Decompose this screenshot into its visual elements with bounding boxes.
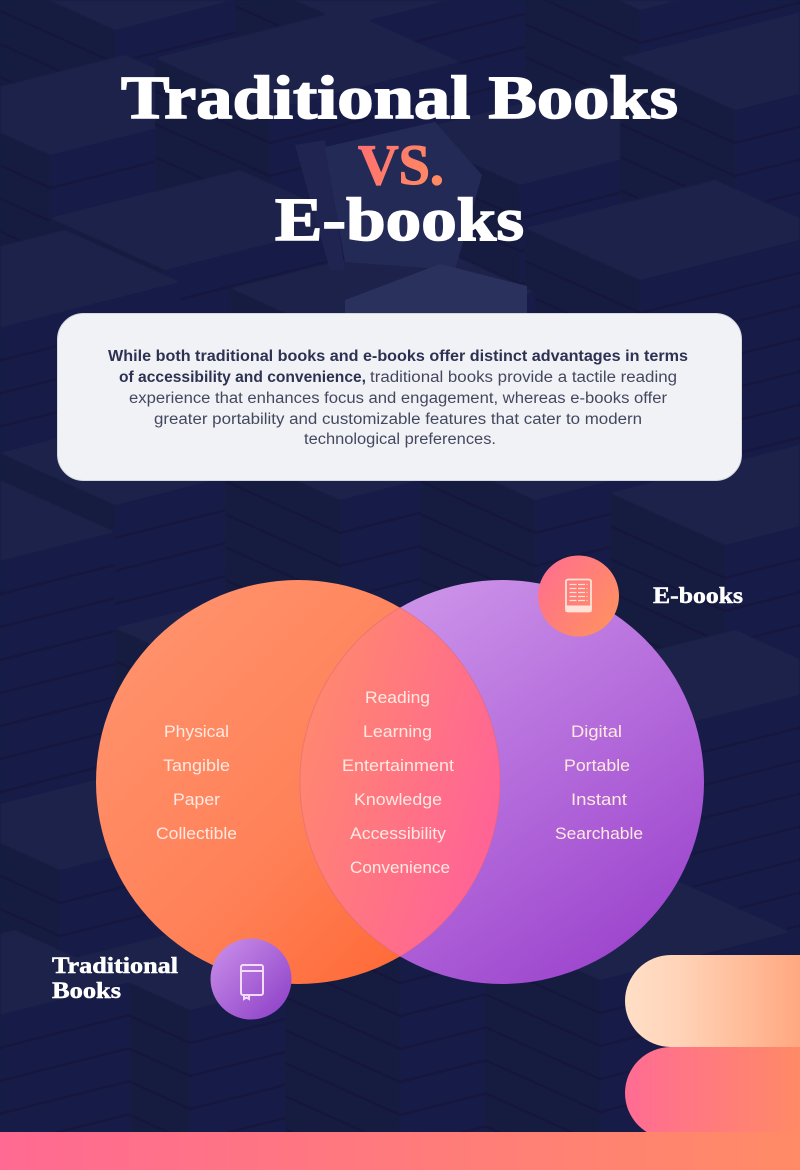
text: shared traits: Convenience	[350, 859, 450, 877]
label: traditional books: Traditional	[52, 953, 178, 978]
text: e-book traits: Instant	[571, 791, 627, 809]
decorative bottom bar	[0, 1132, 800, 1170]
circle: e-books	[300, 580, 704, 984]
text: traditional book traits	[156, 723, 237, 843]
text block: introduction paragraph: experience that enhances focus and engagement, whereas e-books offer	[129, 390, 667, 407]
text block: introduction paragraph: While both traditional books and e-books offer distinct advantages in terms	[108, 348, 688, 365]
icon: book badge	[210, 938, 292, 1020]
decorative book: pink pill	[625, 1047, 800, 1139]
text block: introduction paragraph: technological preferences.	[304, 431, 496, 448]
label: traditional books: Books	[52, 978, 121, 1003]
label: e-books: E-books	[653, 583, 743, 608]
title: E-books	[275, 187, 524, 254]
text: shared traits: Knowledge	[354, 791, 442, 809]
venn diagram	[96, 580, 704, 984]
text block: introduction paragraph: traditional books provide a tactile reading	[370, 369, 677, 386]
text: traditional book traits: Tangible	[163, 757, 230, 775]
text: e-book traits: Digital	[571, 723, 622, 741]
text: traditional book traits: Collectible	[156, 825, 237, 843]
text: shared traits: Accessibility	[350, 825, 447, 843]
title: Traditional Books	[121, 65, 678, 132]
decorative book: peach pill	[625, 955, 800, 1047]
text: traditional book traits: Paper	[173, 791, 221, 809]
label: traditional books	[52, 953, 178, 1003]
text: shared traits	[342, 689, 454, 877]
icon: e-reader badge	[538, 556, 619, 636]
text: shared traits: Entertainment	[342, 757, 454, 775]
panel: introduction	[58, 314, 742, 480]
text: e-book traits	[555, 723, 643, 843]
circle: traditional books	[96, 580, 500, 984]
text: e-book traits: Searchable	[555, 825, 643, 843]
text: traditional book traits: Physical	[164, 723, 229, 741]
text block: introduction paragraph: of accessibility and convenience,	[119, 369, 366, 386]
text: e-book traits: Portable	[564, 757, 630, 775]
text: shared traits: Learning	[363, 723, 432, 741]
text block: introduction paragraph	[108, 348, 688, 448]
text: shared traits: Reading	[365, 689, 430, 707]
title: VS.	[358, 134, 444, 197]
title	[121, 65, 678, 254]
overlap: shared traits	[300, 608, 500, 956]
icon: central open book silhouette	[295, 122, 527, 320]
text block: introduction paragraph: greater portability and customizable features that cater to modern	[154, 411, 642, 428]
